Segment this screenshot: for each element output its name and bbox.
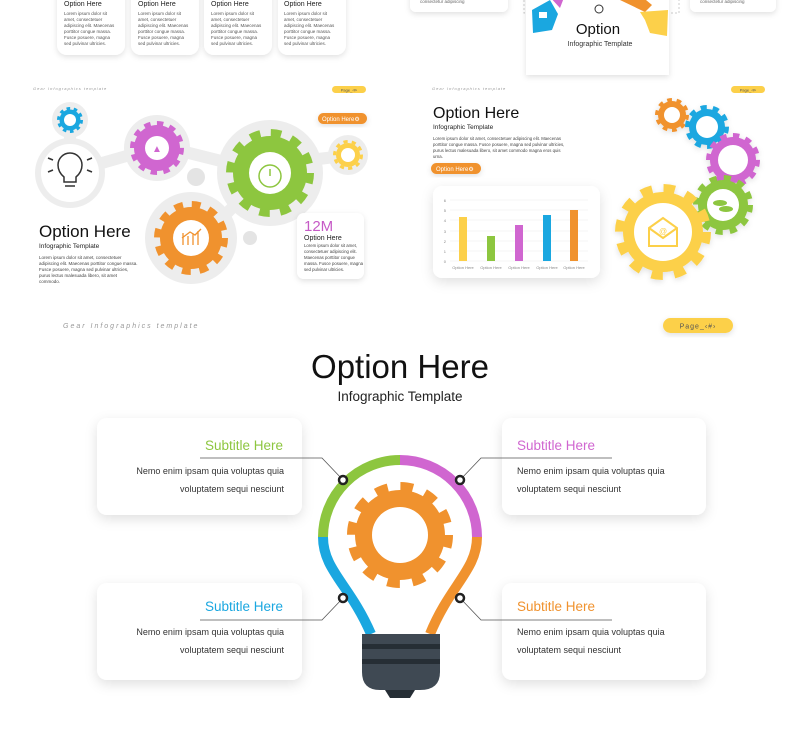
- connector lines: [200, 458, 612, 620]
- top strip: left thumbnail cards: amet, consectetuer: [64, 17, 103, 22]
- bar chart: Option Here: [563, 265, 586, 270]
- card: top-left: Subtitle Here: [205, 438, 283, 453]
- bar chart: Option Here: [536, 265, 559, 270]
- top strip: left thumbnail cards: Fusce posuere, magna: [211, 35, 258, 40]
- dots: [339, 476, 464, 602]
- top strip: left thumbnail cards: Fusce posuere, magna: [138, 35, 185, 40]
- card: bottom-right: voluptatem sequi nesciunt: [517, 645, 622, 655]
- gear: magenta: ▲: [152, 144, 162, 155]
- top strip: left thumbnail cards: porttitor congue massa.: [284, 29, 331, 34]
- top strip: left thumbnail cards: [57, 0, 346, 55]
- 12M card: sed pulvinar ultricies.: [304, 267, 344, 272]
- 12M card: [297, 213, 364, 279]
- top strip: left thumbnail cards: Fusce posuere, magna: [64, 35, 111, 40]
- top strip: left thumbnail cards: Lorem ipsum dolor sit: [64, 11, 108, 16]
- card: top-right: Subtitle Here: [517, 438, 595, 453]
- card: top-right: voluptatem sequi nesciunt: [517, 484, 622, 494]
- middle-left slide: Page_‹#›: [341, 88, 358, 92]
- light bulb: [323, 460, 477, 698]
- bar chart: Option Here: [508, 265, 531, 270]
- top strip: left thumbnail cards: Fusce posuere, magna: [284, 35, 331, 40]
- top strip: left thumbnail cards: adipiscing elit. Maecenas: [64, 23, 115, 28]
- top strip: left thumbnail cards: Option Here: [64, 1, 102, 8]
- card: top-right: [502, 418, 706, 515]
- middle-left slide: adipiscing elit. Maecenas porttitor congue massa.: [39, 261, 138, 266]
- top strip: left thumbnail cards: porttitor congue massa.: [138, 29, 185, 34]
- gear: [352, 486, 448, 584]
- middle-right slide: purus lectus malesuada libero, sit amet commodo magna eros quis: [433, 148, 561, 153]
- gear: yellow small: [334, 142, 362, 168]
- top strip: left thumbnail cards: sed pulvinar ultricies.: [284, 41, 326, 46]
- middle-left slide: Option Here: [39, 222, 131, 241]
- card: top-right: Nemo enim ipsam quia voluptas quia: [517, 466, 665, 476]
- main slide header: [63, 318, 733, 333]
- middle-right slide: porttitor congue massa. Fusce posuere, magna sed pulvinar ultricies,: [433, 142, 564, 147]
- middle-right slide: [431, 86, 765, 278]
- card: bottom-right: [502, 583, 706, 680]
- top strip: left thumbnail cards: sed pulvinar ultricies.: [138, 41, 180, 46]
- middle-right slide: Option Here: [433, 105, 519, 122]
- 12M card: Maecenas porttitor congue: [304, 255, 355, 260]
- bar chart: [433, 186, 600, 278]
- middle-left slide: Option Here⚙: [322, 116, 360, 123]
- top strip: left thumbnail cards: Option Here: [138, 1, 176, 8]
- gear cluster: @: [659, 227, 667, 236]
- top strip: right thumbnail: [410, 0, 776, 75]
- card: top-left: [97, 418, 302, 515]
- bar chart: 5: [444, 208, 447, 213]
- card: bottom-left: Nemo enim ipsam quia voluptas quia: [136, 627, 284, 637]
- middle-left slide: Infographic Template: [39, 243, 100, 250]
- card: bottom-right: Subtitle Here: [517, 599, 595, 614]
- main slide header: Page_‹#›: [680, 324, 716, 330]
- bar chart: 2: [444, 239, 447, 244]
- 12M card: consectetuer adipiscing elit.: [304, 249, 357, 254]
- middle-right slide: Infographic Template: [433, 124, 494, 131]
- icon: bulb outline: [48, 153, 92, 186]
- top strip: left thumbnail cards: Lorem ipsum dolor sit: [211, 11, 255, 16]
- bar chart: 3: [444, 229, 447, 234]
- top strip: left thumbnail cards: Option Here: [284, 1, 322, 8]
- top strip: right thumbnail: Option: [576, 21, 620, 38]
- top strip: left thumbnail cards: amet, consectetuer: [284, 17, 323, 22]
- top strip: left thumbnail cards: sed pulvinar ultricies.: [211, 41, 253, 46]
- bar chart: 6: [444, 198, 447, 203]
- card: top-left: Nemo enim ipsam quia voluptas quia: [136, 466, 284, 476]
- 12M card: 12M: [304, 218, 333, 235]
- top strip: left thumbnail cards: Lorem ipsum dolor sit: [138, 11, 182, 16]
- middle-right slide: Page_‹#›: [740, 88, 757, 92]
- top strip: left thumbnail cards: sed pulvinar ultricies.: [64, 41, 106, 46]
- card: bottom-left: Subtitle Here: [205, 599, 283, 614]
- middle-right slide: urna.: [433, 154, 443, 159]
- bulb base: [362, 634, 440, 690]
- middle-left slide: commodo.: [39, 279, 60, 284]
- gear: orange: [158, 204, 224, 272]
- middle-left slide: Fusce posuere, magna sed pulvinar ultricies,: [39, 267, 128, 272]
- bar chart: 1: [444, 249, 447, 254]
- middle-left slide: Gear Infographics template: [33, 86, 107, 91]
- bar chart: 0: [444, 259, 447, 264]
- gear: green: [230, 133, 310, 213]
- top strip: left thumbnail cards: amet, consectetuer: [211, 17, 250, 22]
- top strip: left thumbnail cards: adipiscing elit. Maecenas: [211, 23, 262, 28]
- middle-left slide: Lorem ipsum dolor sit amet, consectetuer: [39, 255, 122, 260]
- top strip: left thumbnail cards: porttitor congue massa.: [64, 29, 111, 34]
- 12M card: massa. Fusce posuere, magna: [304, 261, 364, 266]
- middle-left slide: purus lectus malesuada libero, sit amet: [39, 273, 118, 278]
- bar chart: Option Here: [452, 265, 475, 270]
- bar chart: Option Here: [480, 265, 503, 270]
- gray connector blobs: [35, 102, 368, 284]
- card: bottom-right: Nemo enim ipsam quia voluptas quia: [517, 627, 665, 637]
- title: Option Here: [311, 348, 489, 385]
- top strip: left thumbnail cards: adipiscing elit. Maecenas: [284, 23, 335, 28]
- middle-right slide: Option Here⚙: [436, 166, 474, 173]
- top strip: left thumbnail cards: adipiscing elit. Maecenas: [138, 23, 189, 28]
- top strip: left thumbnail cards: porttitor congue massa.: [211, 29, 258, 34]
- top strip: left thumbnail cards: Option Here: [211, 1, 249, 8]
- gear: magenta: [132, 124, 182, 172]
- middle-left slide: [33, 86, 368, 284]
- 12M card: Lorem ipsum dolor sit amet,: [304, 243, 357, 248]
- 12M card: Option Here: [304, 235, 342, 242]
- subtitle: Infographic Template: [337, 389, 463, 404]
- top strip: left thumbnail cards: Lorem ipsum dolor sit: [284, 11, 328, 16]
- middle-right slide: Gear Infographics template: [432, 86, 506, 91]
- top strip: left thumbnail cards: amet, consectetuer: [138, 17, 177, 22]
- gear cluster: [620, 100, 758, 276]
- card: bottom-left: voluptatem sequi nesciunt: [180, 645, 284, 655]
- card: bottom-left: [97, 583, 302, 680]
- main slide header: Gear Infographics template: [63, 323, 199, 330]
- card: top-left: voluptatem sequi nesciunt: [180, 484, 284, 494]
- top strip: right thumbnail: Infographic Template: [568, 41, 633, 48]
- middle-right slide: Lorem ipsum dolor sit amet, consectetuer adipiscing elit. Maecenas: [433, 136, 561, 141]
- bar chart: 4: [444, 218, 447, 223]
- gear: blue small: [58, 108, 82, 132]
